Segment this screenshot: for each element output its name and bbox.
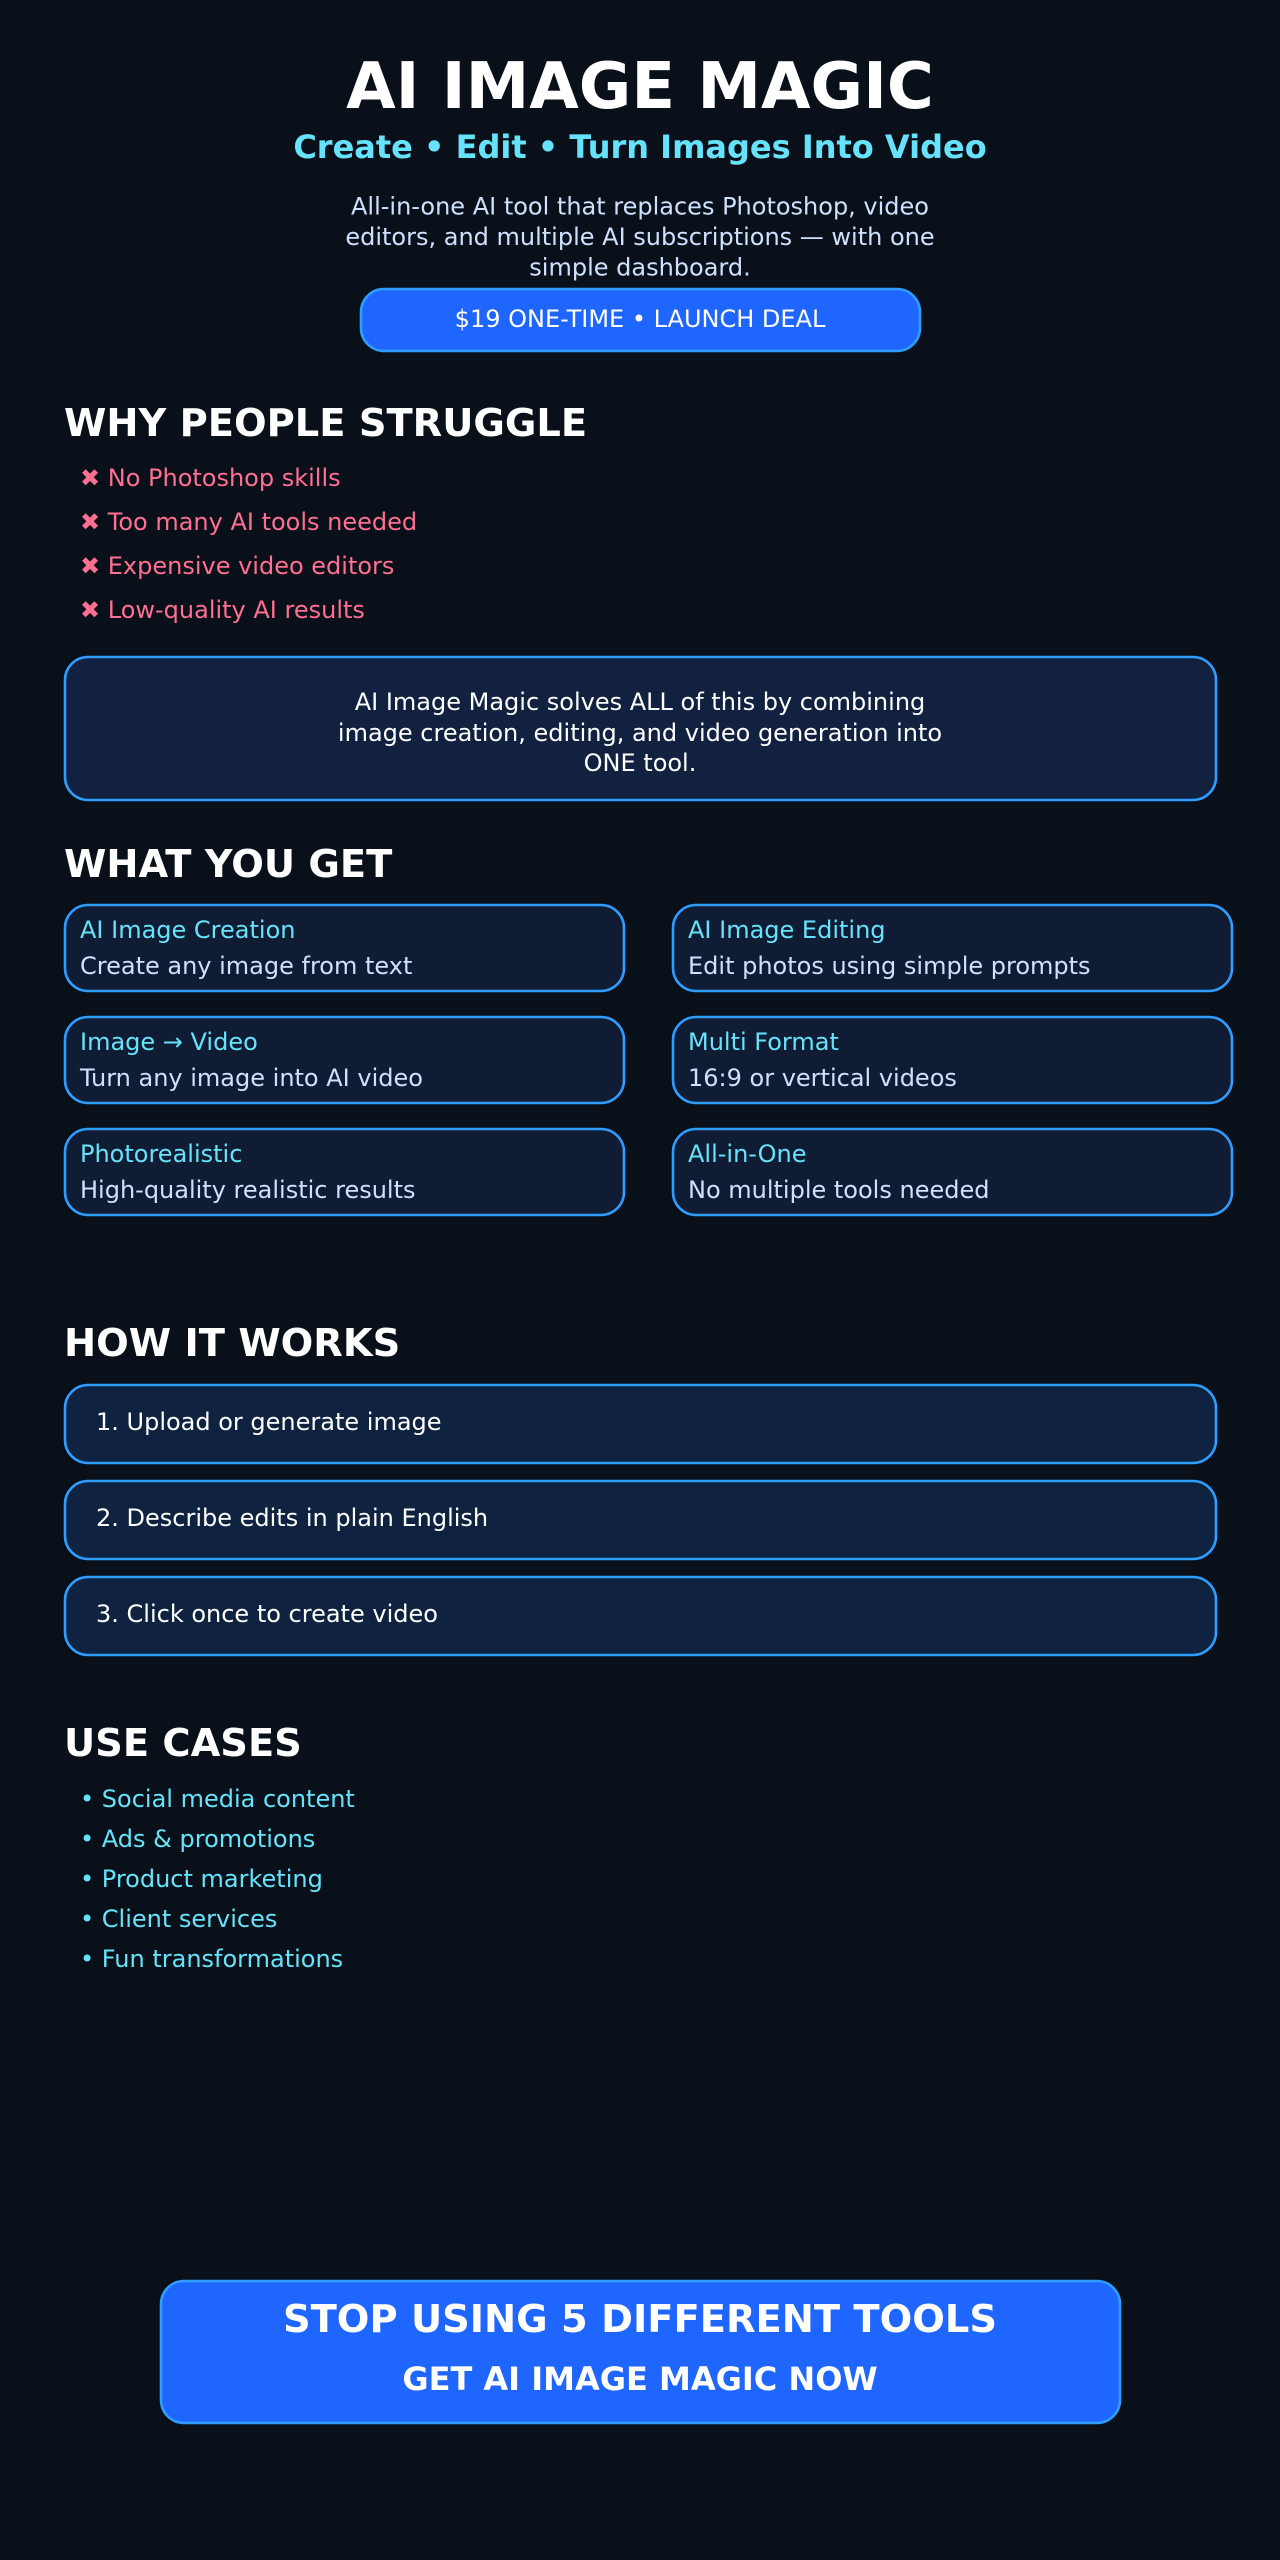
step 1 [65,1385,1216,1463]
step 1: 1. Upload or generate image [96,1408,442,1436]
problem list: ✖ Low-quality AI results [80,596,365,624]
feature card: All-in-One [673,1129,1232,1215]
use case list: • Social media content [80,1785,355,1813]
feature card: AI Image Editing: Edit photos using simple prompts [688,952,1091,980]
problem list: ✖ No Photoshop skills [80,464,341,492]
title: AI IMAGE MAGIC [346,50,934,124]
step 2 [65,1481,1216,1559]
use case list [80,1785,355,1973]
feature card: AI Image Creation [65,905,624,991]
intro paragraph: simple dashboard. [529,254,751,282]
feature card: AI Image Creation: Create any image from text [80,952,412,980]
use case list: • Fun transformations [80,1945,343,1973]
step 2: 2. Describe edits in plain English [96,1504,488,1532]
problem list: ✖ Too many AI tools needed [80,508,417,536]
intro paragraph [345,192,935,282]
use case list: • Product marketing [80,1865,323,1893]
feature card: Image to Video [65,1017,624,1103]
feature card: Photorealistic: Photorealistic [80,1140,242,1168]
feature card: AI Image Editing [673,905,1232,991]
problem list [80,464,417,624]
use case list: • Ads & promotions [80,1825,315,1853]
call to action button: STOP USING 5 DIFFERENT TOOLS [283,2297,997,2342]
intro paragraph: editors, and multiple AI subscriptions — with one [345,223,935,251]
feature card: Multi Format [673,1017,1232,1103]
step 3 [65,1577,1216,1655]
use case list: • Client services [80,1905,277,1933]
call to action button [161,2281,1120,2423]
problem list: ✖ Expensive video editors [80,552,394,580]
step 3: 3. Click once to create video [96,1600,438,1628]
feature card: Multi Format: 16:9 or vertical videos [688,1064,957,1092]
feature card: AI Image Creation: AI Image Creation [80,916,295,944]
solution callout: ONE tool. [584,749,696,777]
solution callout: image creation, editing, and video generation into [338,719,942,747]
heading: how it works: HOW IT WORKS [64,1321,400,1366]
solution callout [65,657,1216,800]
feature card: All-in-One: All-in-One [688,1140,806,1168]
call to action button: GET AI IMAGE MAGIC NOW [402,2360,878,2398]
price badge [361,289,920,351]
heading: why people struggle: WHY PEOPLE STRUGGLE [64,401,587,446]
intro paragraph: All-in-one AI tool that replaces Photoshop, video [351,192,929,220]
feature card: Photorealistic: High-quality realistic results [80,1176,416,1204]
solution callout: AI Image Magic solves ALL of this by combining [355,688,925,716]
feature card: Photorealistic [65,1129,624,1215]
feature card: Image to Video: Turn any image into AI video [79,1064,423,1092]
heading: what you get: WHAT YOU GET [64,842,392,887]
price badge: $19 ONE-TIME • LAUNCH DEAL [455,305,826,333]
subtitle: Create • Edit • Turn Images Into Video [293,128,987,166]
heading: use cases: USE CASES [64,1721,302,1766]
feature card: All-in-One: No multiple tools needed [688,1176,989,1204]
feature card: Multi Format: Multi Format [688,1028,839,1056]
feature card: AI Image Editing: AI Image Editing [688,916,886,944]
feature card: Image to Video: Image → Video [80,1028,258,1056]
